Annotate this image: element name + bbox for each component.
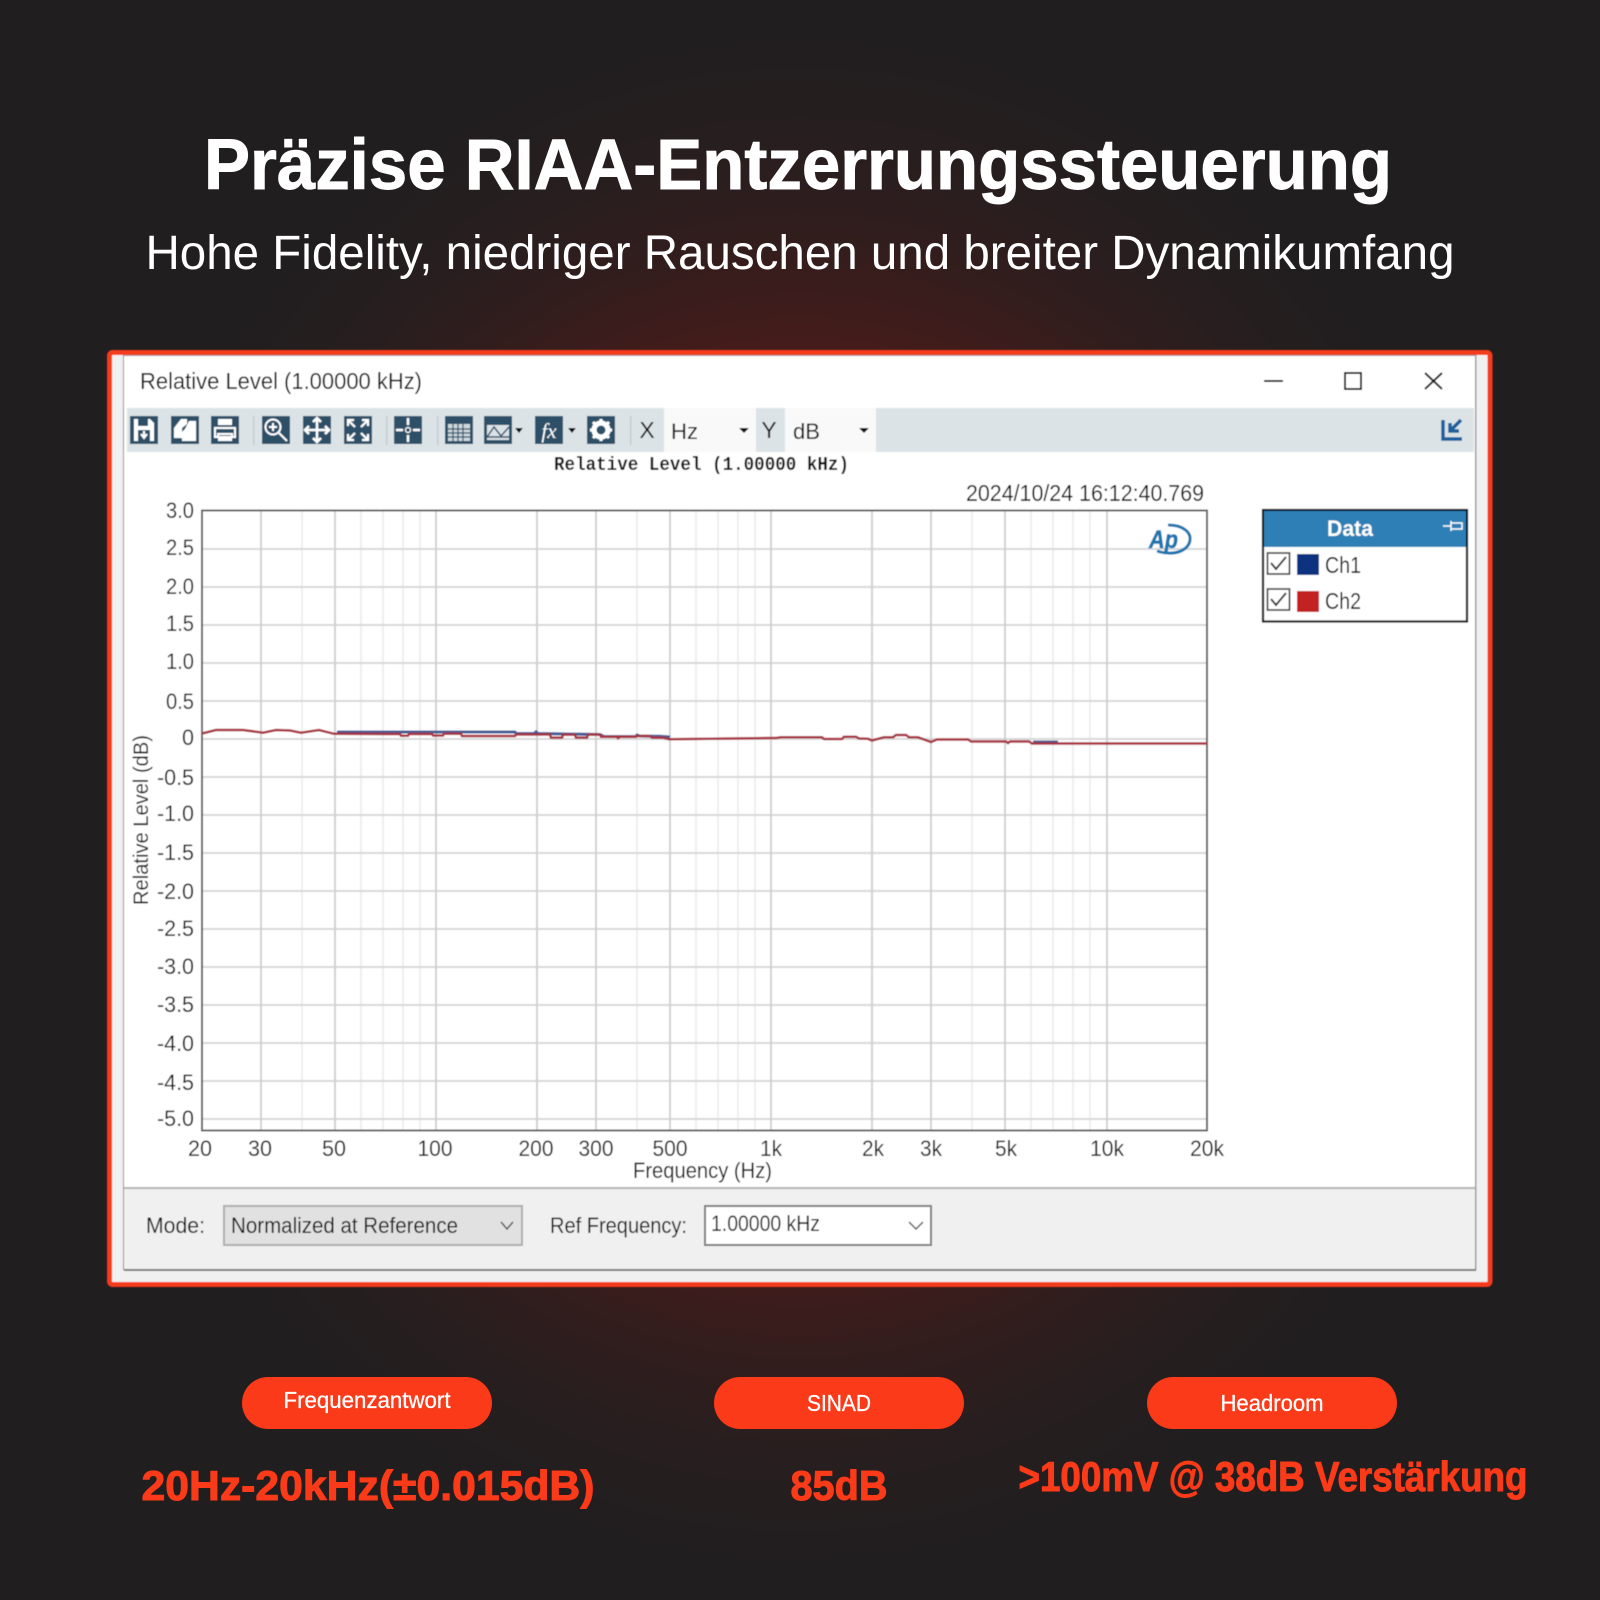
icon: cursor (394, 416, 422, 444)
line chart: relative level vs frequency (202, 510, 1207, 1131)
pill: Headroom (1220, 1390, 1324, 1416)
icon: pin (1443, 521, 1462, 531)
x unit: Hz (671, 419, 698, 444)
value: 85dB (790, 1462, 888, 1509)
y axis labels: 0 (182, 725, 194, 750)
x axis labels: 1k (760, 1136, 783, 1161)
minor frequency grid (302, 510, 1090, 1131)
chart title: Relative Level (1.00000 kHz) (554, 454, 849, 476)
y axis labels (157, 498, 194, 1131)
pill: Frequenzantwort (284, 1387, 451, 1413)
mode label: Mode: (146, 1213, 205, 1238)
y axis labels: -2.0 (157, 879, 194, 904)
x axis labels: 5k (995, 1136, 1018, 1161)
y axis labels: -3.5 (157, 992, 194, 1017)
icon: settings (587, 416, 615, 444)
ref frequency dropdown: 1.00000 kHz (711, 1211, 820, 1236)
icon: zoom (262, 416, 290, 444)
icon: fit (344, 416, 372, 444)
x axis labels: 100 (418, 1136, 452, 1161)
subtitle: Hohe Fidelity, niedriger Rauschen und breiter Dynamikumfang (146, 227, 1454, 280)
x axis labels: 500 (652, 1136, 688, 1161)
axis selector Y: Y (761, 417, 777, 443)
y axis labels: -4.5 (157, 1070, 194, 1095)
value: >100mV @ 38dB Verstärkung (1018, 1453, 1528, 1500)
toolbar (127, 408, 1474, 452)
icon: print (211, 416, 239, 444)
x axis labels: 20k (1190, 1136, 1225, 1161)
data series: Ch1 (337, 732, 1058, 742)
y axis labels: -2.5 (157, 916, 194, 941)
timestamp: 2024/10/24 16:12:40.769 (966, 480, 1204, 506)
value: 20Hz-20kHz(±0.015dB) (142, 1462, 594, 1509)
major frequency grid (261, 510, 1107, 1131)
pill (1147, 1377, 1397, 1429)
spec: frequency response (142, 1377, 594, 1509)
y axis labels: -1.5 (157, 840, 194, 865)
y axis labels: 0.5 (166, 689, 194, 714)
y axis labels: 1.0 (166, 649, 194, 674)
y axis title: Relative Level (dB) (130, 735, 153, 905)
icon: pan (303, 416, 331, 444)
spec: headroom (1018, 1377, 1528, 1500)
x axis labels: 50 (322, 1136, 346, 1161)
legend item: Ch1: Ch1 (1325, 552, 1361, 578)
icon: function: fx (541, 419, 557, 443)
y axis labels: 2.5 (166, 535, 194, 560)
legend item: Ch2 (1268, 588, 1361, 614)
pill: SINAD (807, 1390, 871, 1416)
icon: collapse (1443, 420, 1462, 439)
ref frequency label: Ref Frequency: (550, 1213, 687, 1238)
logo: AP: Ap (1148, 526, 1178, 554)
y axis labels: -3.0 (157, 954, 194, 979)
legend (1263, 510, 1467, 622)
legend item: Ch1 (1268, 552, 1361, 578)
legend item: Ch2: Ch2 (1325, 588, 1361, 614)
x axis title: Frequency (Hz) (633, 1158, 772, 1183)
x axis labels: 300 (578, 1136, 614, 1161)
y axis labels: 2.0 (166, 574, 194, 599)
level grid (202, 549, 1207, 1119)
window controls (1264, 373, 1442, 389)
x dropdown arrow (739, 428, 749, 433)
pill (714, 1377, 964, 1429)
x axis labels: 3k (920, 1136, 943, 1161)
pill (242, 1377, 492, 1429)
y axis labels: -1.0 (157, 801, 194, 826)
y axis labels: -4.0 (157, 1031, 194, 1056)
y axis labels: -0.5 (157, 765, 194, 790)
ref frequency dropdown (705, 1206, 931, 1245)
icon: function (535, 416, 576, 444)
mode dropdown (224, 1206, 522, 1245)
spec: SINAD (714, 1377, 964, 1509)
y axis labels: -5.0 (157, 1106, 194, 1131)
x axis labels: 30 (248, 1136, 272, 1161)
x axis labels: 2k (862, 1136, 885, 1161)
x axis labels (188, 1136, 1225, 1161)
x axis labels: 20 (188, 1136, 212, 1161)
y axis labels: 3.0 (166, 498, 194, 523)
legend title: Data (1327, 516, 1374, 541)
icon: graph (484, 416, 523, 444)
x axis labels: 200 (518, 1136, 554, 1161)
y unit: dB (793, 419, 820, 444)
title: Präzise RIAA-Entzerrungssteuerung (204, 126, 1392, 205)
y axis labels: 1.5 (166, 611, 194, 636)
icon: table (445, 416, 473, 444)
mode dropdown: Normalized at Reference (231, 1213, 458, 1238)
y dropdown arrow (859, 428, 869, 433)
icon: save (130, 416, 158, 444)
x axis labels: 10k (1090, 1136, 1125, 1161)
axis selector X: X (639, 417, 655, 443)
icon: copy (171, 416, 199, 444)
window title text: Relative Level (1.00000 kHz) (140, 368, 422, 394)
panel: measurement software window (110, 352, 1490, 1284)
data series: Ch2 (202, 730, 1207, 744)
